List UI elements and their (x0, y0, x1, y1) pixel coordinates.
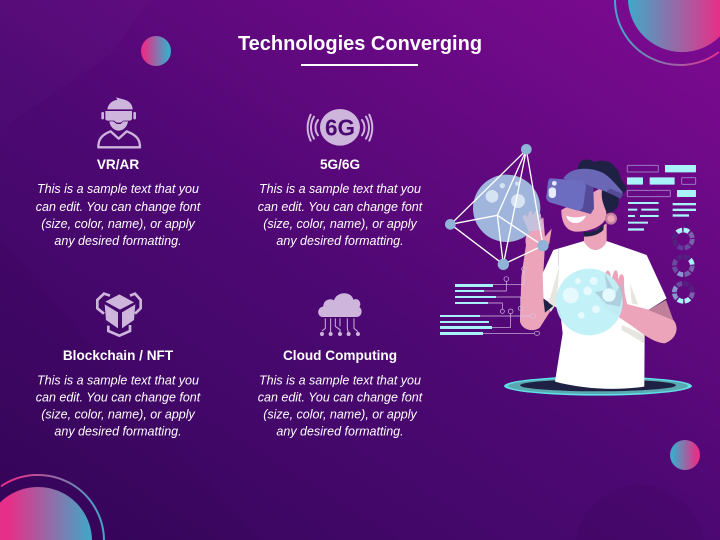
icon: VR headset person (98, 97, 140, 147)
neck and face (561, 187, 617, 250)
decoration: top-right gradient circle (615, 0, 720, 65)
text block (258, 374, 423, 438)
circuit data lines (440, 267, 540, 335)
arm right (603, 290, 677, 343)
wireframe pyramid (445, 144, 549, 270)
right hand (595, 270, 627, 313)
hologram sphere with wireframe (473, 175, 543, 242)
VR headset (546, 169, 623, 214)
text block: any desired formatting. (276, 424, 404, 438)
icon: 6G signal: 6G (325, 114, 355, 140)
text block: can edit. You can change font (36, 200, 201, 214)
icon: cloud network (318, 293, 362, 336)
shirt shadows (547, 248, 638, 312)
heading: Cloud Computing (283, 348, 397, 363)
donut 3 (674, 283, 692, 301)
donut 1 (674, 230, 692, 248)
panel: Cloud Computing (258, 293, 423, 438)
text block: can edit. You can change font (258, 200, 423, 214)
text block: any desired formatting. (276, 234, 404, 248)
heading: VR/AR (97, 157, 139, 172)
donut 2 (674, 257, 692, 275)
text block: any desired formatting. (54, 424, 182, 438)
text block: (size, color, name), or apply (41, 217, 196, 231)
text block: This is a sample text that you (259, 374, 421, 388)
text block: can edit. You can change font (36, 390, 201, 404)
hair (577, 159, 626, 213)
platform disc (504, 376, 692, 396)
text block: (size, color, name), or apply (263, 217, 418, 231)
donut indicators (674, 230, 692, 301)
decoration: small circle bottom right (670, 440, 700, 470)
heading: 5G/6G (320, 157, 360, 172)
arm left (520, 217, 552, 330)
sleeve trim (543, 299, 667, 313)
icon: 6G signal (308, 109, 372, 146)
title: Technologies Converging (238, 33, 482, 55)
title underline (301, 64, 418, 66)
data panel (627, 165, 696, 231)
panel: Blockchain / NFT (36, 294, 201, 438)
shirt (543, 241, 667, 389)
text block: can edit. You can change font (258, 390, 423, 404)
hologram orb (556, 269, 623, 335)
panel: 5G/6G (258, 109, 423, 248)
text block: any desired formatting. (54, 234, 182, 248)
decoration: bottom-left gradient circle (0, 475, 104, 540)
text block: This is a sample text that you (259, 182, 421, 196)
text block: This is a sample text that you (37, 182, 199, 196)
text block: (size, color, name), or apply (41, 408, 196, 422)
decoration: small circle top (141, 36, 171, 66)
icon: blockchain cube (97, 294, 141, 336)
heading: Blockchain / NFT (63, 348, 174, 363)
text block: This is a sample text that you (37, 374, 199, 388)
text block (258, 182, 423, 248)
text block (36, 374, 201, 438)
panel: VR/AR (36, 97, 201, 248)
illustration: VR user with holograms (440, 144, 696, 396)
text block: (size, color, name), or apply (263, 408, 418, 422)
text block (36, 182, 201, 248)
